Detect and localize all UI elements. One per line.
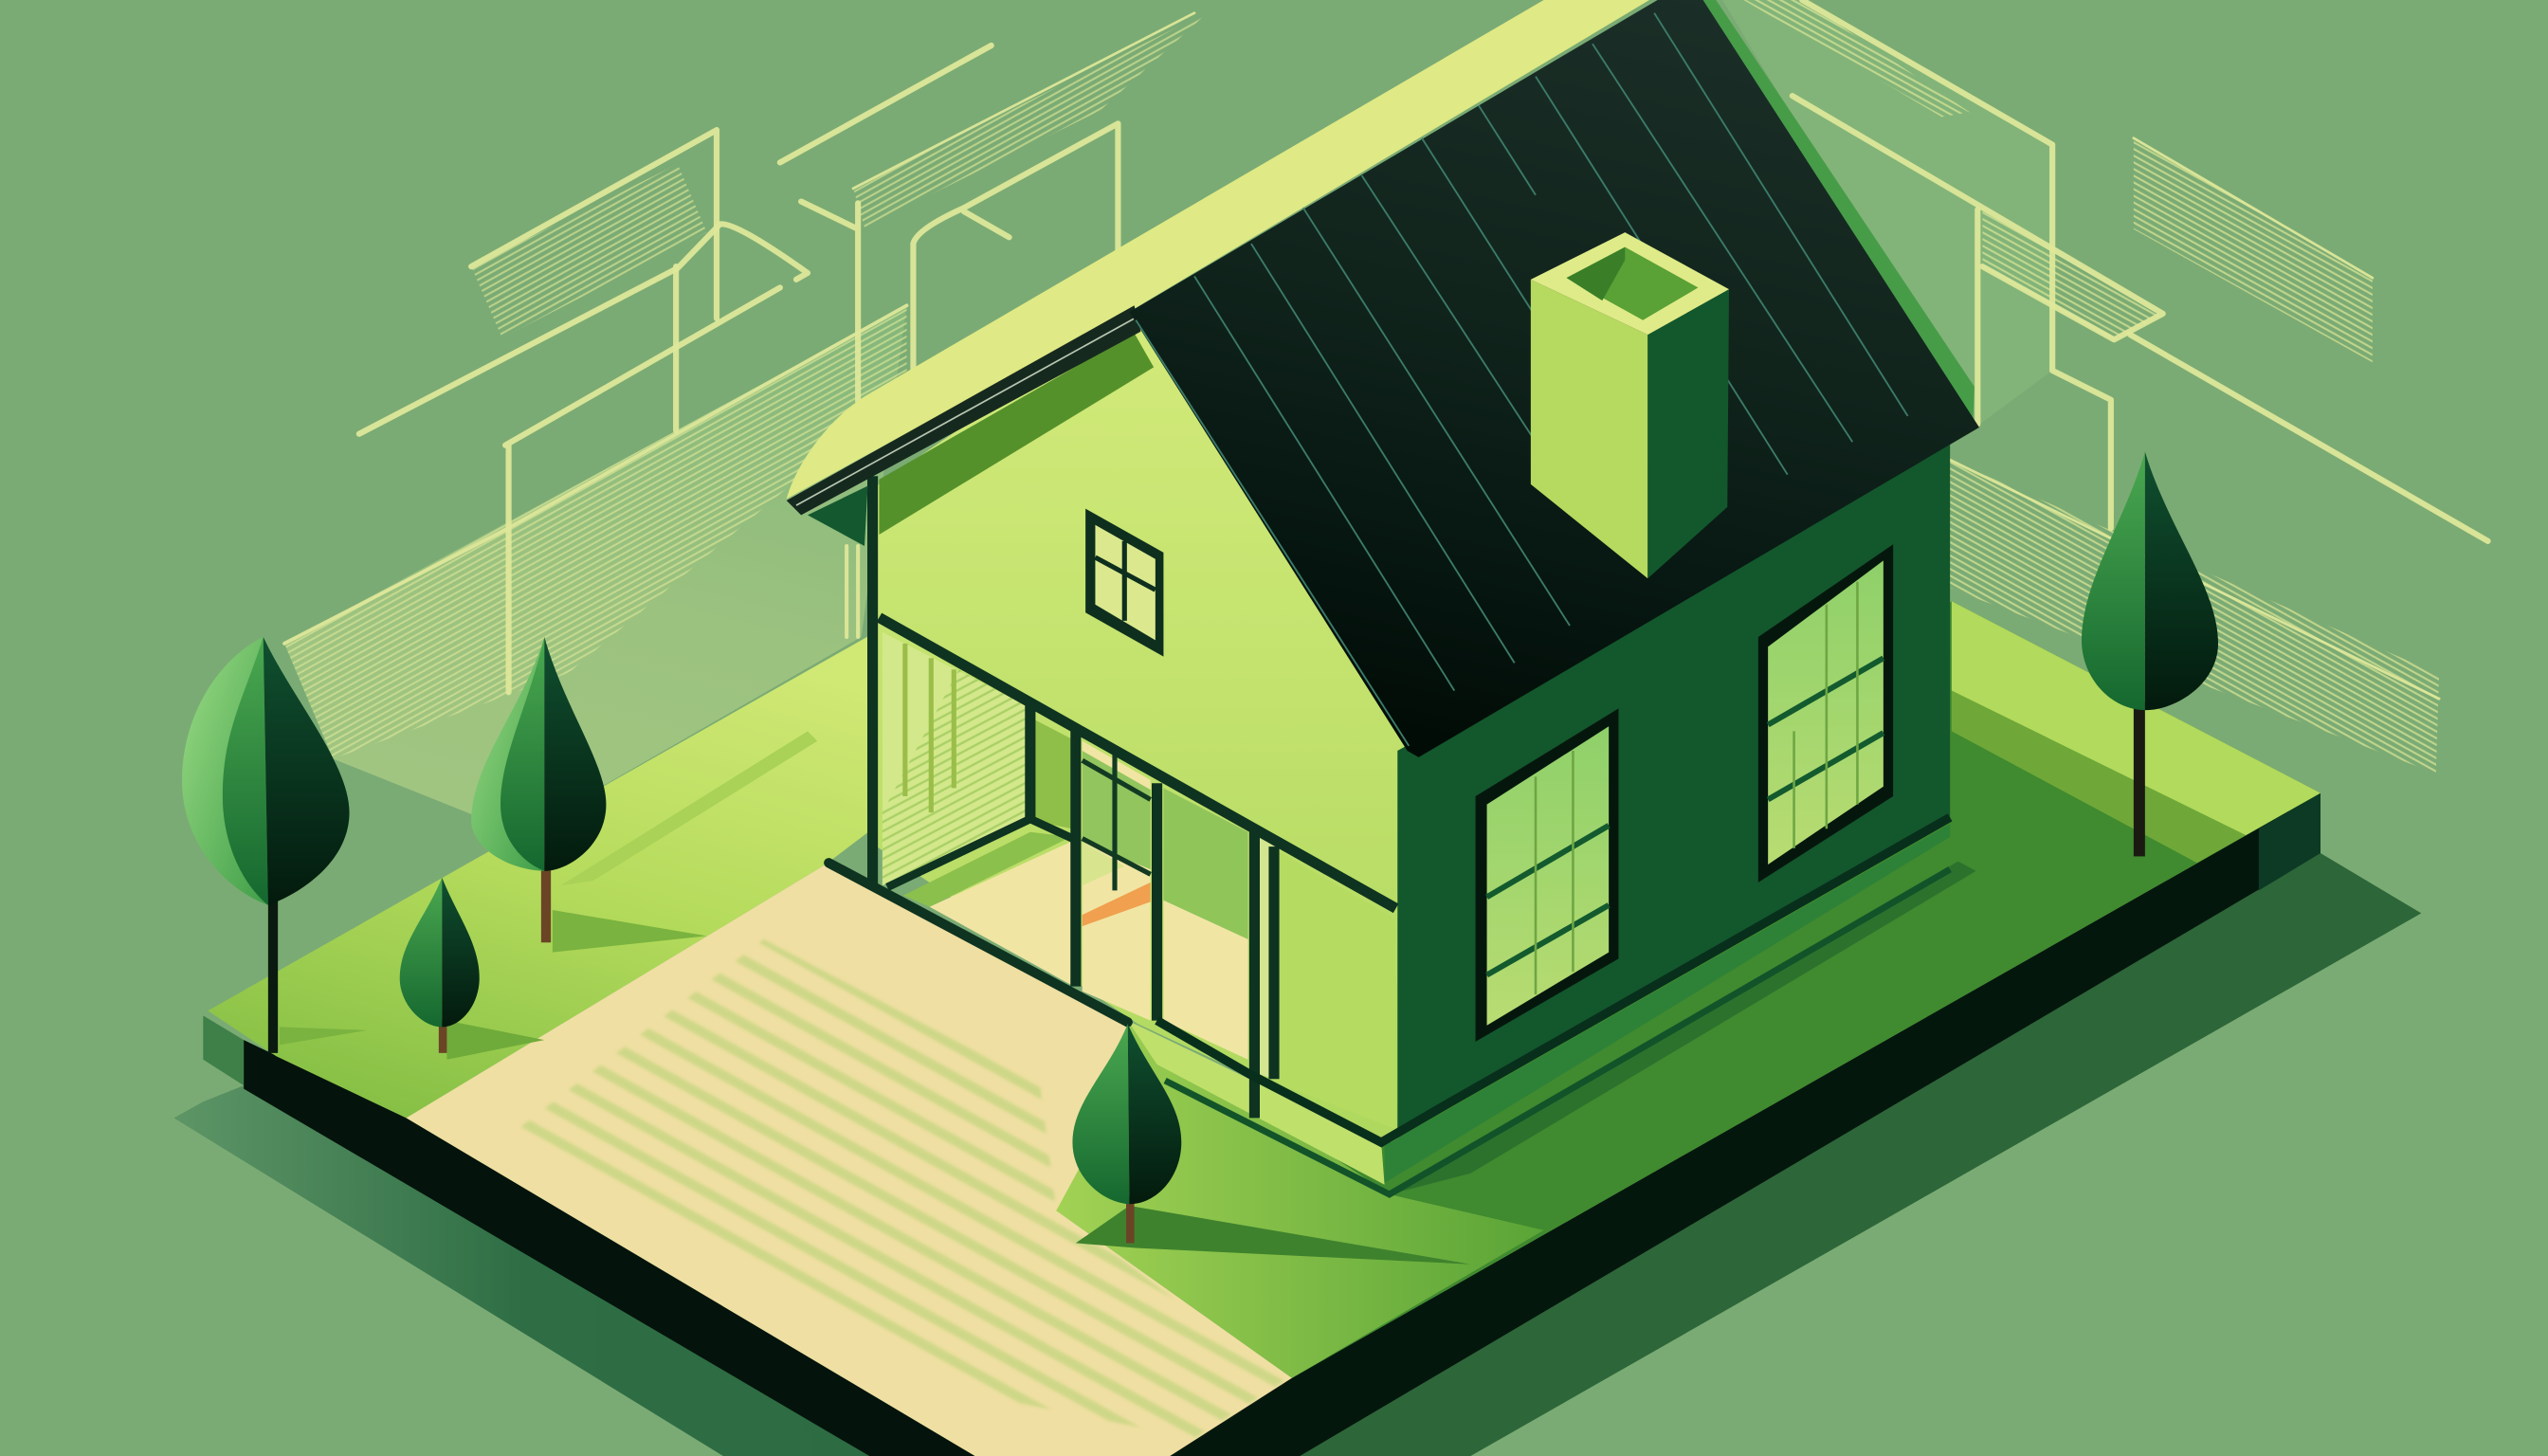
lawn: right and front <box>1056 601 2320 1378</box>
right window lower <box>1476 708 1618 1042</box>
tree 3 <box>400 878 480 1053</box>
plinth <box>1128 1021 1385 1185</box>
door opening <box>1083 741 1151 1021</box>
right window upper <box>1758 544 1893 883</box>
sketched wireframe: right <box>1722 0 2488 774</box>
tree 2 <box>471 637 606 942</box>
right wall <box>1397 442 1950 1133</box>
tree shadows <box>280 731 1470 1265</box>
sketched wireframe: left <box>284 11 1209 833</box>
lawn: left <box>208 634 873 1118</box>
porch left glass <box>883 632 1032 885</box>
upper window <box>1085 509 1163 657</box>
left wall <box>874 309 1417 1146</box>
base slab <box>203 793 2320 1456</box>
gable fascia <box>787 305 1140 515</box>
tree 4 <box>1072 1024 1181 1243</box>
porch floor <box>930 842 1071 985</box>
frame beams and posts <box>873 476 1396 1118</box>
roof edge green <box>1700 0 1975 426</box>
roof ribs <box>1136 13 1908 746</box>
roof light band <box>787 0 1649 499</box>
right panel <box>1279 851 1396 1129</box>
eave shadow <box>879 333 1154 535</box>
ground shadow <box>173 853 2421 1456</box>
driveway <box>407 864 1292 1456</box>
tree 5 <box>2082 452 2218 856</box>
eave bracket <box>808 486 867 546</box>
house <box>787 0 1979 1194</box>
room window <box>1163 788 1248 1060</box>
roof <box>1129 0 1979 757</box>
chimney <box>1531 232 1729 578</box>
tree 1 <box>182 637 350 1053</box>
